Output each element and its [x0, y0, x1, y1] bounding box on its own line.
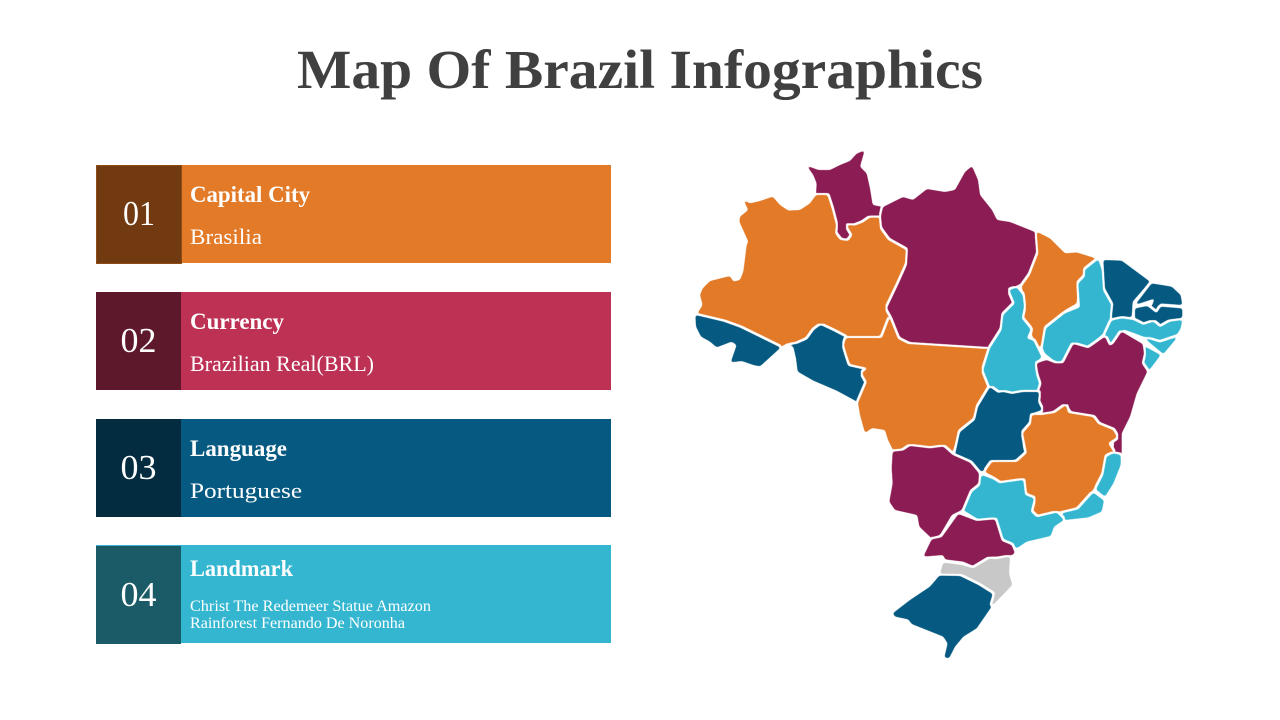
title: Map Of Brazil Infographics: [297, 39, 983, 100]
heading: capital city: Capital City: [190, 182, 310, 207]
map of Brazil: [695, 150, 1182, 658]
region: Paraiba: [1105, 318, 1182, 346]
region: Mato Grosso: [844, 317, 990, 453]
region: Tocantins: [983, 288, 1042, 393]
region: Para: [881, 166, 1037, 347]
region: Mato Grosso do Sul: [889, 446, 979, 538]
panel: landmark: [96, 545, 611, 644]
number badge 04: 04: [120, 575, 156, 614]
region: Sao Paulo: [963, 475, 1064, 548]
region: Espirito Santo: [1096, 453, 1121, 497]
region: Rondonia: [787, 325, 867, 402]
region: Paraiba north: [1135, 306, 1182, 327]
number badge 04: [96, 546, 181, 644]
text: portuguese: Portuguese: [190, 478, 302, 503]
heading: currency: Currency: [190, 309, 284, 334]
region: Goias: [955, 387, 1042, 472]
panel: currency: [96, 292, 611, 390]
region: Piaui: [1043, 259, 1113, 363]
region: Santa Catarina: [940, 557, 1012, 605]
number badge 02: 02: [120, 321, 156, 360]
heading: landmark: Landmark: [190, 556, 293, 581]
region: Bahia: [1037, 332, 1147, 457]
region: Rio Grande do Norte: [1135, 283, 1182, 310]
panel: capital city: [96, 165, 611, 264]
region: Pernambuco: [1143, 337, 1178, 354]
region: Roraima: [807, 150, 883, 241]
region: Rio de Janeiro: [1062, 493, 1104, 520]
number badge 03: [96, 419, 181, 517]
text: landmarks list: [190, 598, 431, 632]
region: Amazonas: [697, 195, 908, 347]
text: landmarks list: Christ The Redemeer Statue Amazon: [190, 598, 431, 615]
number badge 02: [96, 292, 181, 390]
text: brasilia: Brasilia: [190, 224, 262, 249]
number badge 03: 03: [120, 448, 156, 487]
region: Minas Gerais: [985, 405, 1117, 517]
region: Rio Grande do Sul: [893, 576, 993, 658]
text: landmarks list: Rainforest Fernando De Noronha: [190, 615, 405, 632]
region: Parana: [923, 514, 1015, 566]
number badge 01: [96, 166, 182, 264]
number badge 01: 01: [123, 194, 155, 233]
region: Sergipe: [1143, 346, 1161, 370]
panel: language: [96, 419, 611, 517]
region: Ceara: [1103, 260, 1150, 319]
region: Acre: [695, 315, 781, 366]
region: Maranhao: [1022, 232, 1096, 348]
text: brazilian real: Brazilian Real(BRL): [190, 351, 374, 376]
heading: language: Language: [190, 436, 287, 461]
